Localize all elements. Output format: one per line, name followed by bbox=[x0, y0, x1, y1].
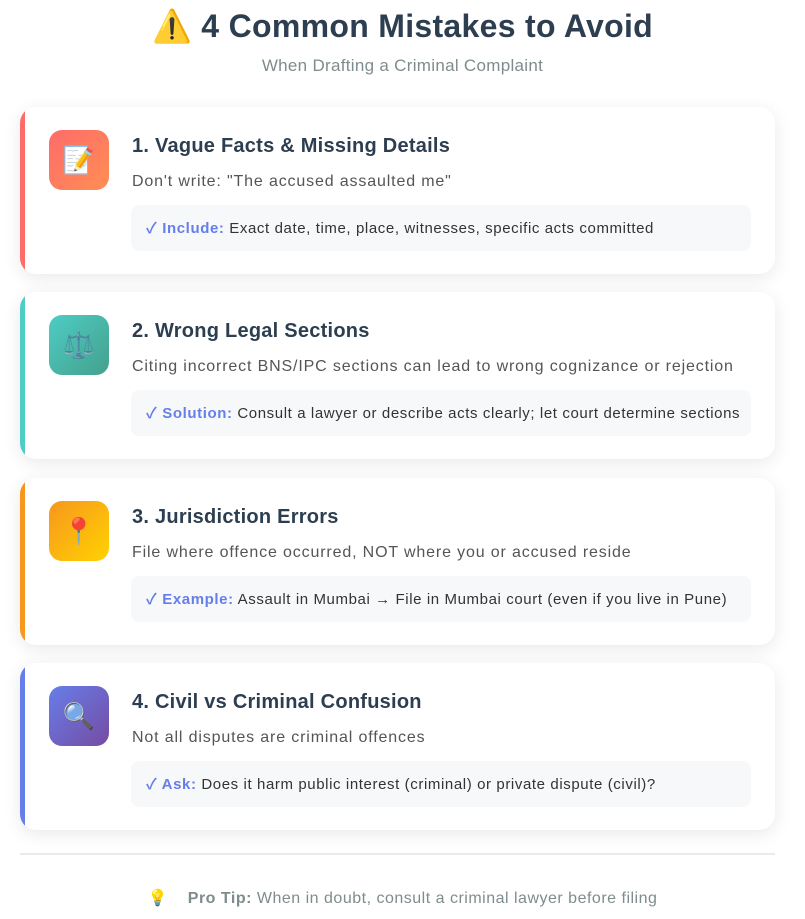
tip 3 bbox=[131, 576, 751, 622]
icon: pin: 📍 bbox=[63, 516, 95, 546]
title: ⚠️ 4 Common Mistakes to Avoid bbox=[152, 8, 653, 44]
panel: mistake 4 bbox=[20, 663, 775, 830]
tip 2 bbox=[131, 390, 751, 436]
tip 4 bbox=[131, 761, 751, 807]
icon: document: 📝 bbox=[63, 144, 95, 174]
heading 1: 1. Vague Facts & Missing Details bbox=[132, 135, 450, 157]
pro tip: 💡 Pro Tip: When in doubt, consult a criminal lawyer before filing bbox=[148, 890, 657, 907]
panel: mistake 3 bbox=[20, 478, 775, 645]
panel: mistake 2 bbox=[20, 292, 775, 459]
heading 2: 2. Wrong Legal Sections bbox=[132, 320, 370, 342]
heading 3: 3. Jurisdiction Errors bbox=[132, 506, 339, 528]
text 3: File where offence occurred, NOT where you or accused reside bbox=[132, 544, 632, 561]
text 1: Don't write: "The accused assaulted me" bbox=[132, 173, 452, 190]
icon: pin bbox=[49, 501, 109, 561]
tip 2: ✓ Solution: Consult a lawyer or describe acts clearly; let court determine sections bbox=[146, 405, 740, 422]
icon: document bbox=[49, 130, 109, 190]
tip 3: ✓ Example: Assault in Mumbai → File in Mumbai court (even if you live in Pune) bbox=[146, 591, 727, 608]
tip 1 bbox=[131, 205, 751, 251]
tip 4: ✓ Ask: Does it harm public interest (criminal) or private dispute (civil)? bbox=[146, 776, 656, 793]
subtitle: When Drafting a Criminal Complaint bbox=[262, 56, 543, 75]
icon: scales: ⚖️ bbox=[63, 330, 95, 360]
panel: mistake 1 bbox=[20, 107, 775, 274]
icon: scales bbox=[49, 315, 109, 375]
icon: magnifier: 🔍 bbox=[63, 700, 95, 730]
text 2: Citing incorrect BNS/IPC sections can lead to wrong cognizance or rejection bbox=[132, 358, 734, 375]
icon: magnifier bbox=[49, 686, 109, 746]
heading 4: 4. Civil vs Criminal Confusion bbox=[132, 691, 422, 713]
text 4: Not all disputes are criminal offences bbox=[132, 729, 425, 746]
tip 1: ✓ Include: Exact date, time, place, witnesses, specific acts committed bbox=[146, 220, 654, 237]
